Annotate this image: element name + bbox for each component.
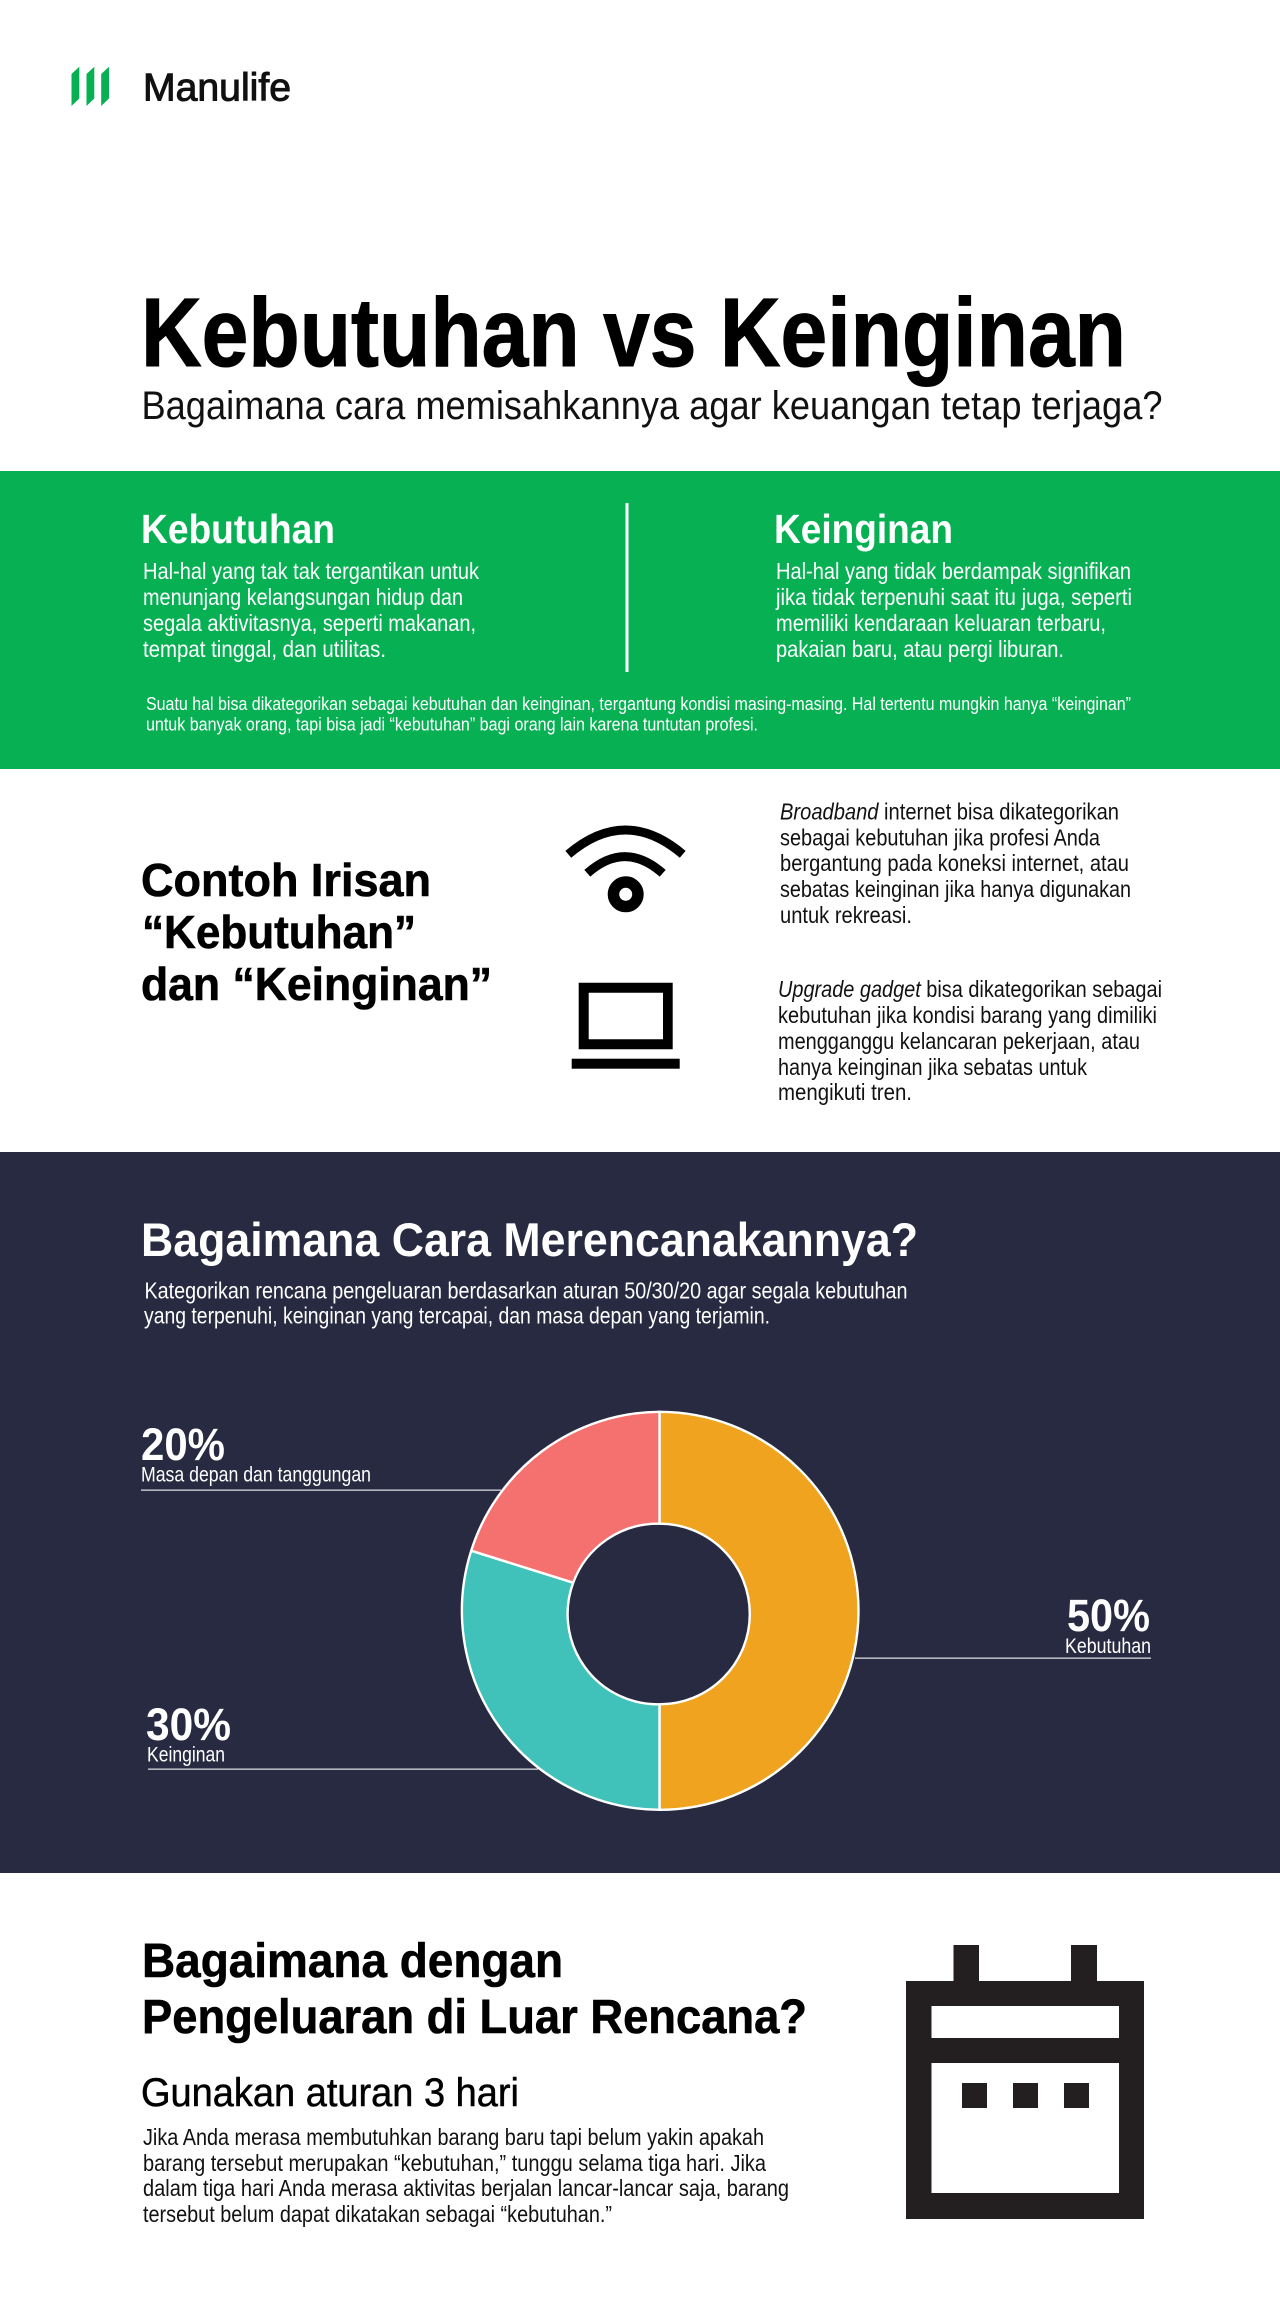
text: 3 day rule [143, 2124, 789, 2227]
text: broadband example: sebagai kebutuhan jika profesi Anda [780, 824, 1101, 850]
panel: definitions [0, 471, 1280, 769]
text: Keinginan definition: Hal-hal yang tidak berdampak signifikan [776, 558, 1131, 584]
icon: laptop [572, 983, 680, 1069]
label: 30%: 30% [146, 1699, 231, 1750]
panel: planning [0, 1152, 1280, 1873]
heading: Bagaimana Cara Merencanakannya: Bagaimana Cara Merencanakannya? [141, 1213, 918, 1266]
text: broadband example: Broadband internet bisa dikategorikan [780, 798, 1119, 824]
text: 3 day rule: tersebut belum dapat dikatakan sebagai “kebutuhan.” [143, 2201, 612, 2227]
heading: Kebutuhan: Kebutuhan [141, 506, 335, 552]
text: Kebutuhan definition: segala aktivitasnya, seperti makanan, [143, 610, 476, 636]
text: Keinginan definition: memiliki kendaraan keluaran terbaru, [776, 610, 1106, 636]
text: Keinginan definition: jika tidak terpenuhi saat itu juga, seperti [775, 584, 1132, 610]
title: Kebutuhan vs Keinginan [141, 278, 1126, 387]
text: planning description: yang terpenuhi, keinginan yang tercapai, dan masa depan yang terjamin. [144, 1302, 770, 1328]
icon: wifi [568, 830, 683, 907]
text: category note [146, 694, 1131, 734]
heading: Contoh Irisan: Contoh Irisan [141, 854, 431, 906]
text: upgrade gadget example: mengganggu kelancaran pekerjaan, atau [778, 1028, 1140, 1054]
subheading: Gunakan aturan 3 hari: Gunakan aturan 3 hari [141, 2071, 519, 2115]
text: category note: Suatu hal bisa dikategorikan sebagai kebutuhan dan keinginan, tergantung kondisi masing-masing. Hal tertentu mungkin hanya “keinginan” [146, 694, 1131, 714]
icon: calendar [906, 1945, 1144, 2219]
text: Kebutuhan definition: menunjang kelangsungan hidup dan [143, 584, 463, 610]
label: 30%: Keinginan [147, 1744, 225, 1766]
heading: Pengeluaran di Luar Rencana: Bagaimana dengan [142, 1935, 563, 1988]
text: Kebutuhan definition: tempat tinggal, dan utilitas. [143, 636, 386, 662]
label: 20%: Masa depan dan tanggungan [141, 1464, 371, 1486]
heading: Contoh Irisan [141, 854, 492, 1010]
heading: Keinginan: Keinginan [774, 506, 953, 552]
segment: 30% Keinginan [462, 1551, 660, 1810]
logo: Manulife [72, 66, 291, 110]
text: upgrade gadget example: mengikuti tren. [778, 1079, 912, 1105]
text: upgrade gadget example: hanya keinginan jika sebatas untuk [778, 1054, 1087, 1080]
text: planning description [144, 1278, 908, 1328]
segment: 50% Kebutuhan [660, 1412, 858, 1810]
text: Kebutuhan definition [143, 558, 479, 662]
text: broadband example: untuk rekreasi. [780, 902, 912, 928]
label: 20%: 20% [141, 1419, 225, 1470]
text: Kebutuhan definition: Hal-hal yang tak tak tergantikan untuk [143, 558, 479, 584]
logo wordmark: Manulife [143, 66, 291, 110]
label: 50%: Kebutuhan [1065, 1635, 1151, 1658]
chart: 50/30/20 donut [462, 1412, 858, 1810]
icon: Manulife green blades [72, 67, 109, 106]
text: broadband example [780, 798, 1131, 928]
label: 50% [855, 1590, 1151, 1659]
label: 50%: 50% [1067, 1590, 1150, 1641]
segment: 20% Masa depan [471, 1412, 660, 1583]
text: 3 day rule: Jika Anda merasa membutuhkan barang baru tapi belum yakin apakah [143, 2124, 764, 2150]
text: Keinginan definition [775, 558, 1132, 662]
text: upgrade gadget example: kebutuhan jika kondisi barang yang dimiliki [778, 1002, 1157, 1028]
text: category note: untuk banyak orang, tapi bisa jadi “kebutuhan” bagi orang lain karena tuntutan profesi. [146, 714, 758, 734]
text: Keinginan definition: pakaian baru, atau pergi liburan. [776, 636, 1064, 662]
text: broadband example: sebatas keinginan jika hanya digunakan [780, 876, 1131, 902]
text: planning description: Kategorikan rencana pengeluaran berdasarkan aturan 50/30/20 agar segala kebutuhan [144, 1278, 908, 1304]
subtitle: Bagaimana cara memisahkannya agar keuangan tetap terjaga? [142, 384, 1162, 428]
text: broadband example: bergantung pada koneksi internet, atau [780, 850, 1129, 876]
text: 3 day rule: barang tersebut merupakan “kebutuhan,” tunggu selama tiga hari. Jika [143, 2150, 767, 2176]
text: 3 day rule: dalam tiga hari Anda merasa aktivitas berjalan lancar-lancar saja, barang [143, 2175, 789, 2201]
text: upgrade gadget example: Upgrade gadget bisa dikategorikan sebagai [778, 976, 1162, 1002]
heading: Contoh Irisan: dan “Keinginan” [141, 958, 492, 1010]
heading: Contoh Irisan: “Kebutuhan” [142, 906, 416, 958]
label: 20% [141, 1419, 501, 1491]
heading: Pengeluaran di Luar Rencana [142, 1935, 807, 2044]
heading: Pengeluaran di Luar Rencana: Pengeluaran di Luar Rencana? [142, 1991, 807, 2044]
label: 30% [146, 1699, 538, 1770]
text: upgrade gadget example [778, 976, 1162, 1105]
